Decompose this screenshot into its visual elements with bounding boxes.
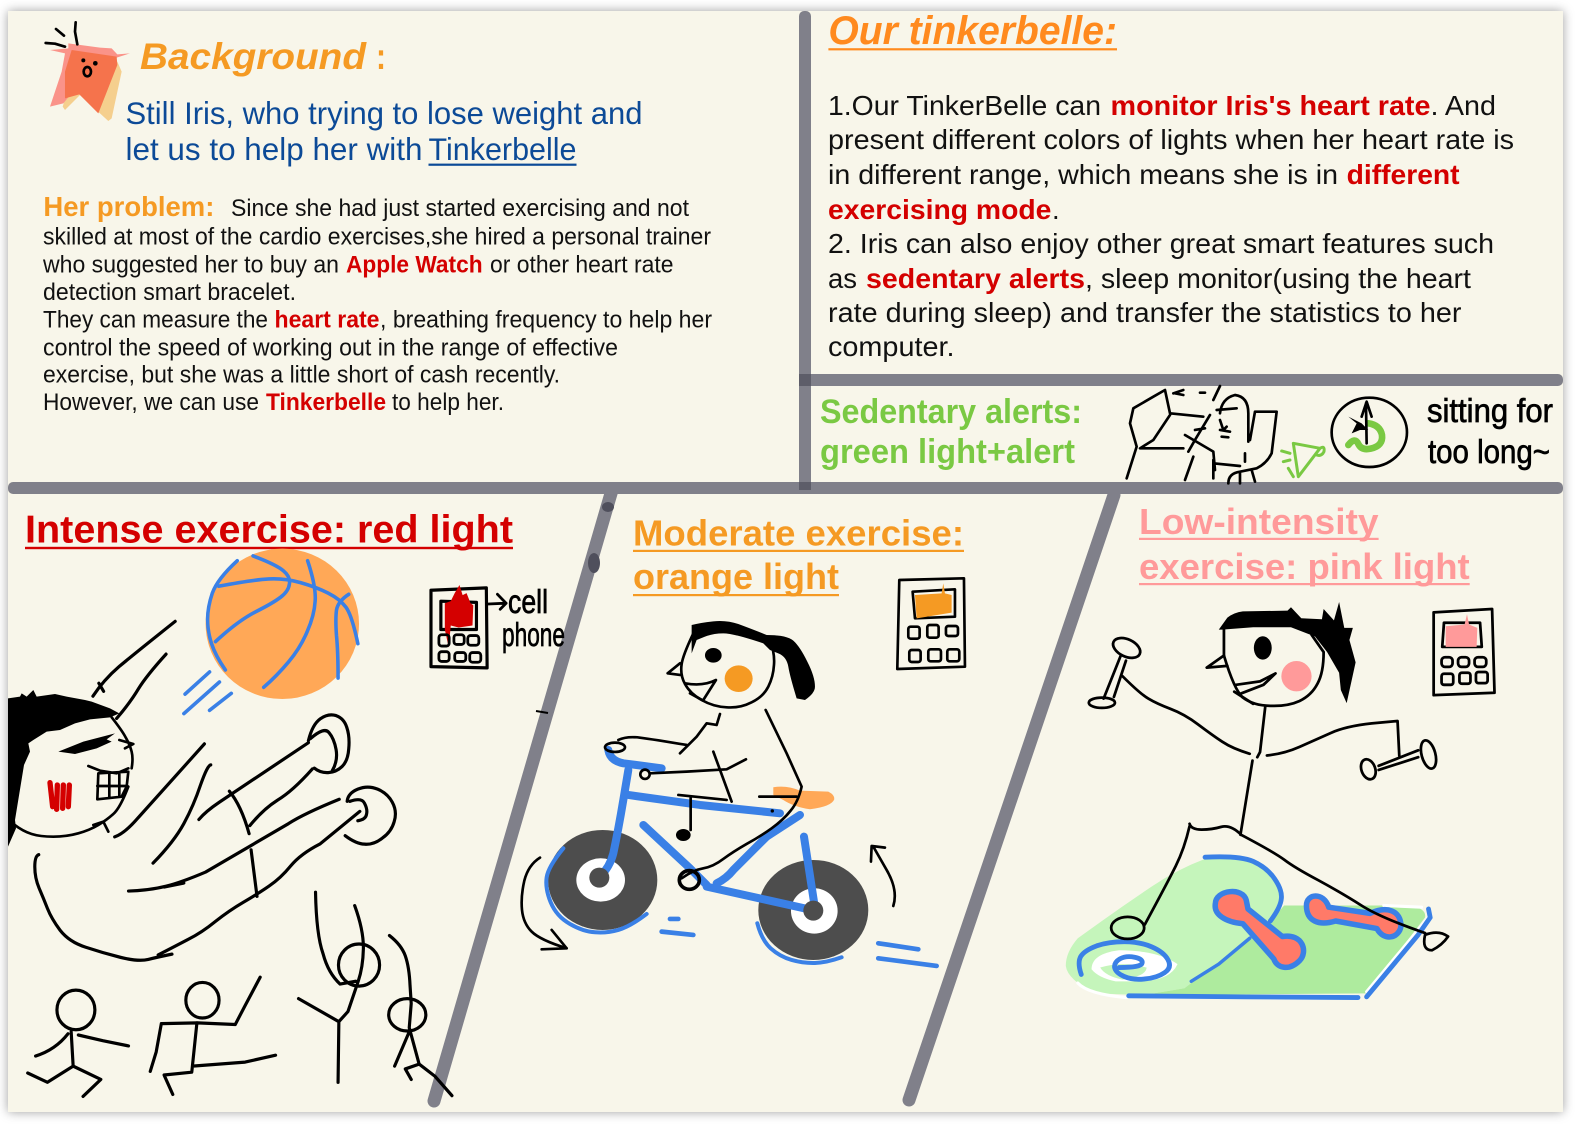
sketch: four stick figures: [28, 892, 452, 1096]
heading: moderate exercise: orange light: [633, 556, 839, 597]
her problem text: who suggested her to buy an: [42, 251, 339, 278]
feature list: 1.Our TinkerBelle can: [828, 90, 1101, 121]
feature list: [828, 90, 1514, 362]
sketch: girl riding: [605, 621, 815, 889]
heading: background: Background: [140, 36, 367, 77]
arrows: wheel rotation: [522, 846, 895, 949]
feature list: sedentary alerts: [866, 263, 1085, 294]
her problem text: to help her.: [392, 389, 504, 416]
feature list: computer.: [828, 331, 954, 362]
heading: moderate exercise: Moderate exercise:: [633, 513, 964, 554]
sedentary heading: Sedentary alerts:: [820, 393, 1082, 431]
her problem text: skilled at most of the cardio exercises,she hired a personal trainer: [43, 223, 711, 250]
intro text: [126, 95, 642, 167]
her problem text: However, we can use: [43, 389, 259, 416]
sketch: player head: [8, 690, 133, 847]
intro text: Tinkerbelle: [428, 131, 576, 167]
sketch: person sitting at laptop: [1127, 386, 1277, 483]
her problem text: exercise, but she was a little short of cash recently.: [43, 361, 560, 388]
panel: low-intensity exercise: [1066, 501, 1495, 998]
sketch: yoga mat with dumbbells: [1066, 857, 1430, 998]
feature list: . And: [1430, 90, 1496, 121]
handwritten label: cell phone: phone: [502, 616, 565, 653]
heading: our tinkerbelle: Our tinkerbelle:: [828, 9, 1117, 53]
her problem text: Apple Watch: [346, 251, 483, 278]
her problem text: [42, 191, 712, 416]
icon: clock with green arrow: [1332, 398, 1407, 467]
sedentary heading: green light+alert: [820, 433, 1075, 471]
icon: phone with red light: [431, 585, 506, 668]
sedentary heading: [820, 393, 1082, 471]
sketch: player arms and body: [35, 621, 395, 960]
sketch: woman lifting dumbbells: [1089, 602, 1448, 950]
her problem text: , breathing frequency to help her: [380, 306, 712, 333]
her problem text: Tinkerbelle: [266, 389, 386, 416]
her problem text: detection smart bracelet.: [43, 279, 296, 306]
panel: sedentary alerts: [820, 386, 1553, 483]
heading: low-intensity exercise: exercise: pink light: [1139, 546, 1470, 587]
feature list: in different range, which means she is in: [828, 159, 1338, 190]
intro text: let us to help her with: [126, 131, 422, 167]
feature list: rate during sleep) and transfer the statistics to her: [828, 297, 1462, 328]
feature list: monitor Iris's heart rate: [1110, 90, 1430, 121]
handwritten note: [1427, 392, 1553, 470]
panel: background: [42, 22, 712, 416]
feature list: different: [1347, 159, 1460, 190]
her problem text: or other heart rate: [490, 251, 674, 278]
handwritten note: too long~: [1428, 433, 1550, 470]
her problem text: control the speed of working out in the range of effective: [43, 334, 618, 361]
panel: our tinkerbelle: [828, 9, 1514, 362]
feature list: 2. Iris can also enjoy other great smart features such: [828, 228, 1494, 259]
her problem text: heart rate: [274, 306, 380, 333]
heading: low-intensity exercise: Low-intensity: [1139, 501, 1379, 542]
her problem text: Her problem:: [43, 191, 214, 222]
handwritten note: sitting for: [1427, 392, 1553, 429]
icon: green megaphone: [1282, 443, 1324, 477]
feature list: , sleep monitor(using the heart: [1085, 263, 1471, 294]
panel: moderate exercise: [522, 513, 965, 966]
heading: moderate exercise: [633, 513, 964, 597]
handwritten label: cell phone: [502, 583, 565, 653]
icon: phone with pink light: [1434, 609, 1495, 695]
sketch: blue bicycle: [546, 750, 937, 966]
icon: phone with orange light: [897, 578, 965, 669]
panel: intense exercise: [8, 509, 565, 1096]
handwritten label: cell phone: cell: [508, 583, 548, 620]
feature list: as: [828, 263, 857, 294]
feature list: .: [1052, 194, 1060, 225]
her problem text: Since she had just started exercising and not: [231, 195, 689, 222]
intro text: Still Iris, who trying to lose weight and: [126, 95, 642, 131]
feature list: exercising mode: [828, 194, 1051, 225]
heading: intense exercise: Intense exercise: red light: [25, 509, 513, 552]
heading: low-intensity exercise: [1139, 501, 1470, 587]
icon: surprised bookmark: [46, 22, 130, 121]
basketball: [184, 549, 359, 714]
her problem text: They can measure the: [43, 306, 268, 333]
feature list: present different colors of lights when her heart rate is: [828, 124, 1514, 155]
heading colon: :: [376, 36, 386, 77]
